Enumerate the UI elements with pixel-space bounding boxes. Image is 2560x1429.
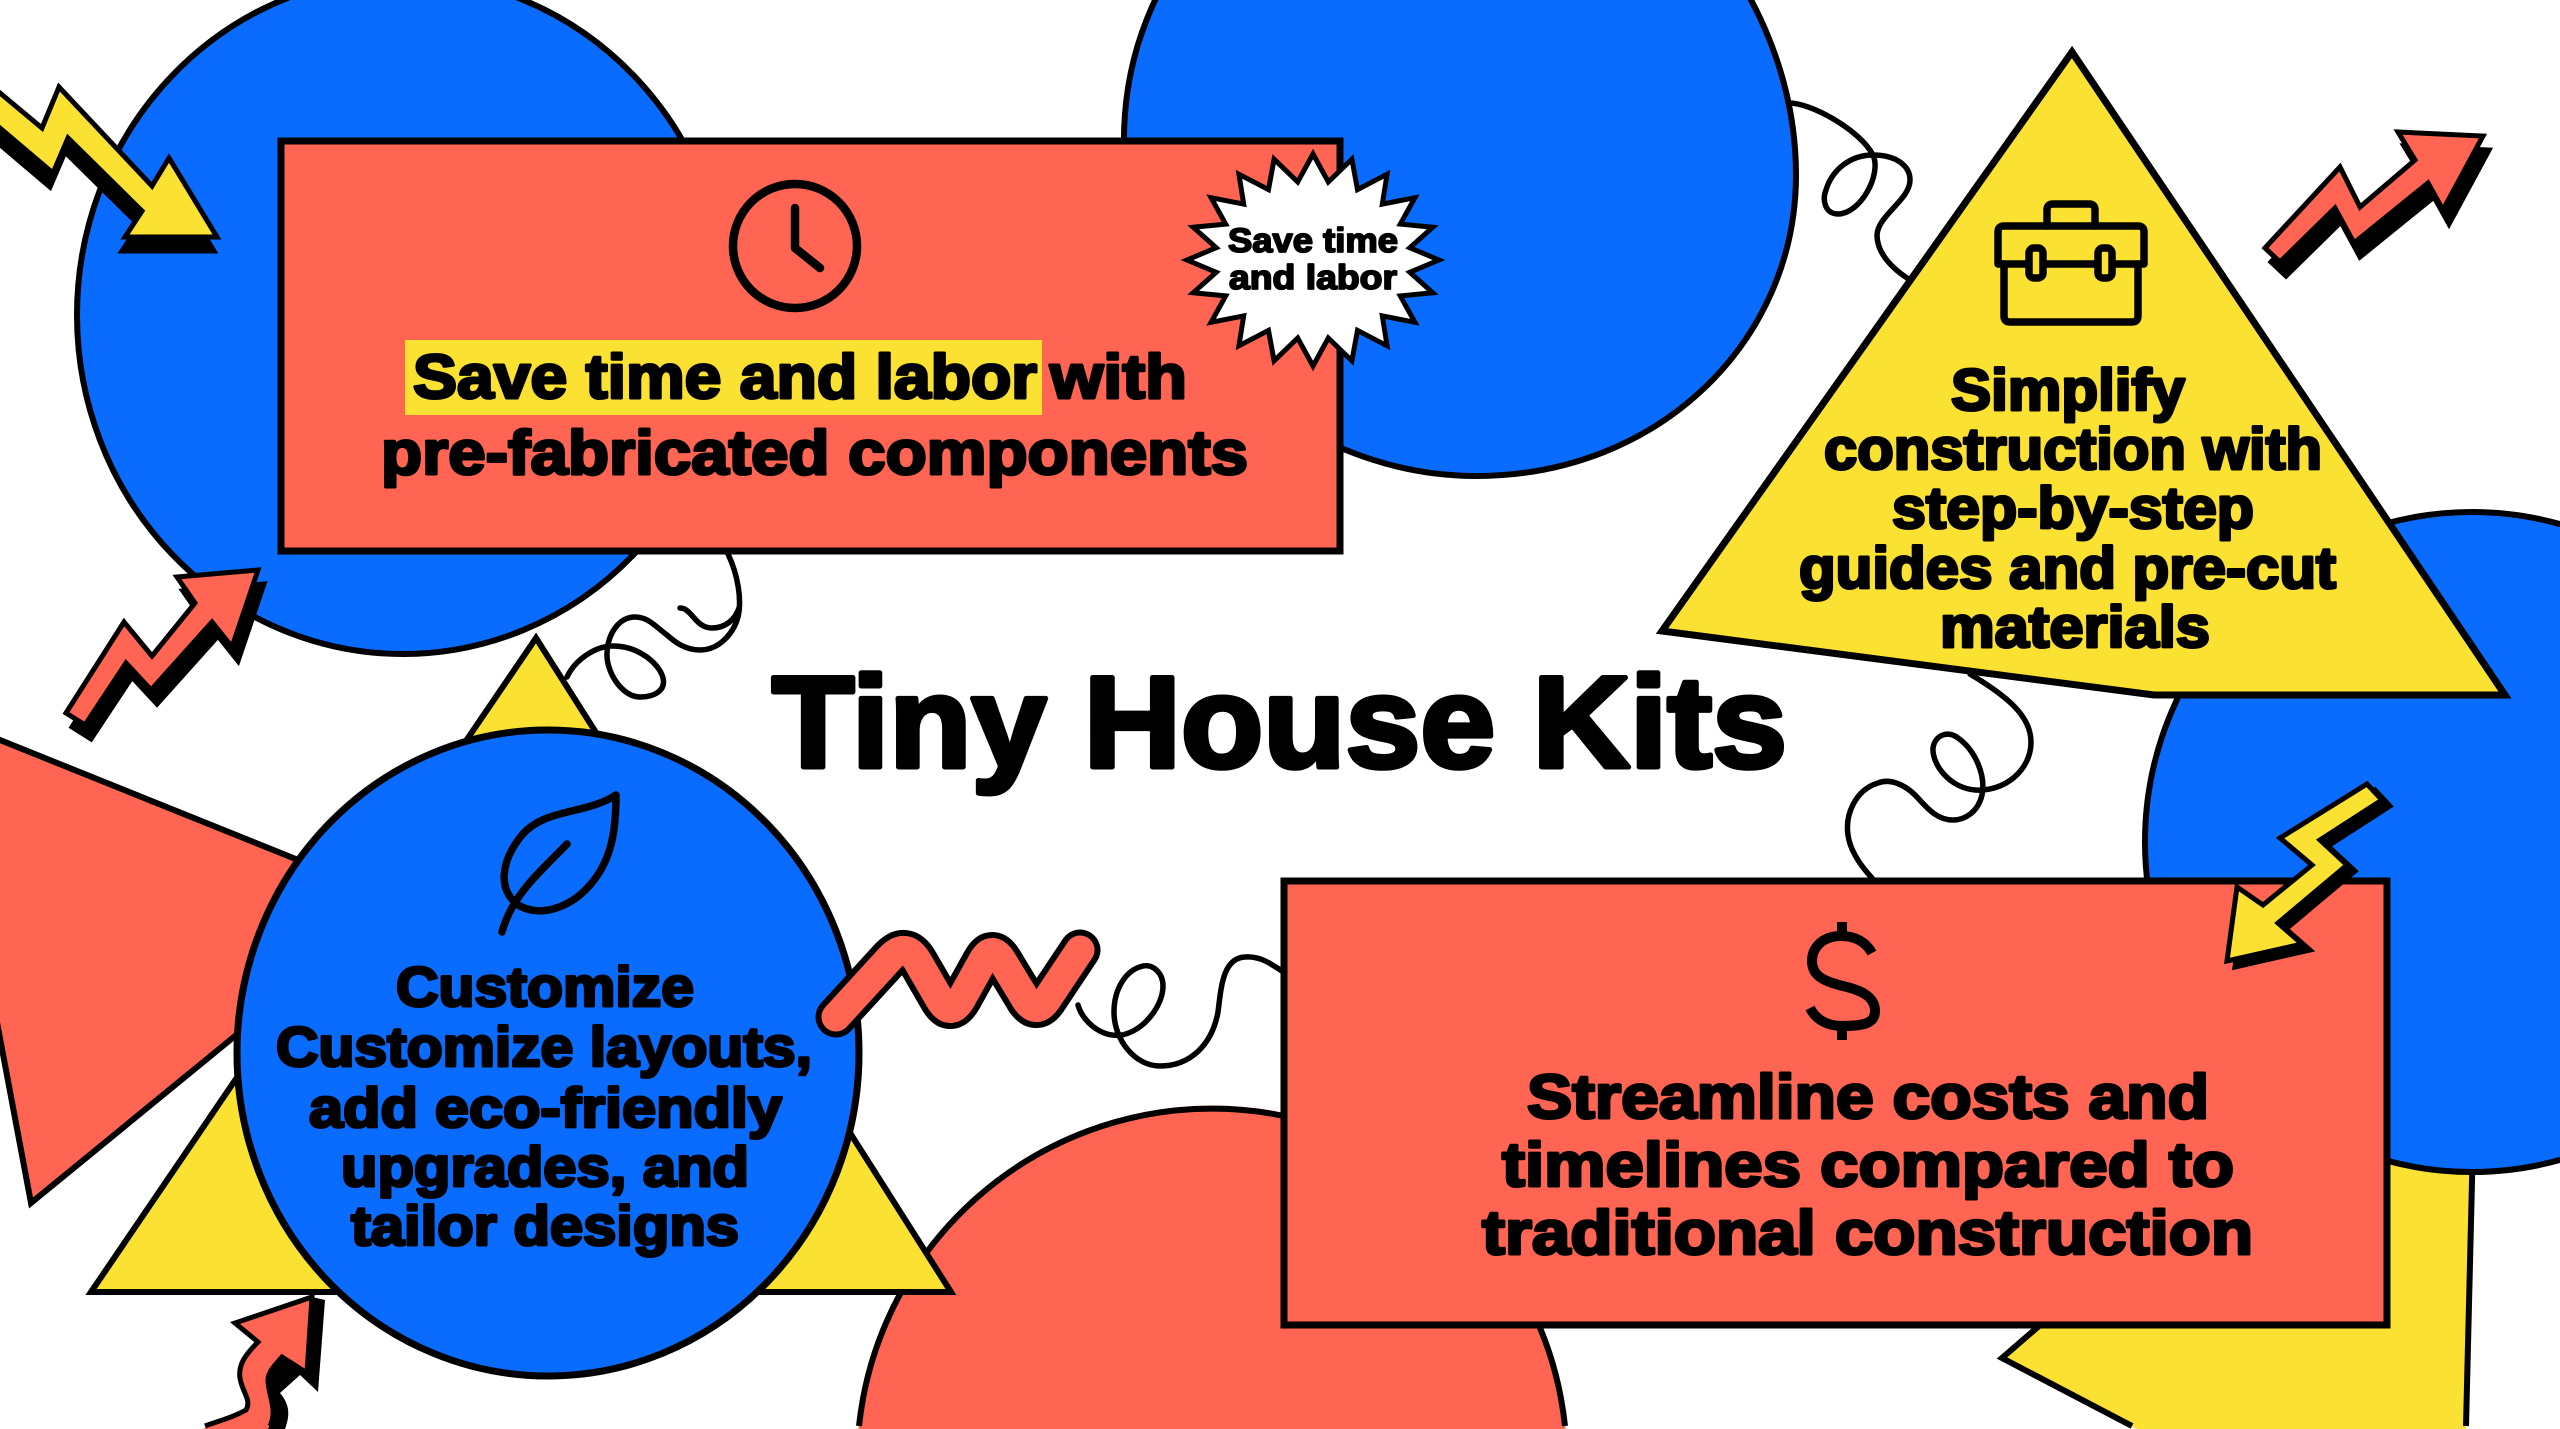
text: streamline: traditional construction [1482, 1199, 2253, 1268]
red triangle left [0, 736, 400, 1203]
text: streamline: timelines compared to [1502, 1131, 2234, 1200]
text: simplify: materials [1940, 595, 2210, 660]
panel: streamline rectangle [1284, 881, 2387, 1325]
blue circle top left [77, 0, 729, 654]
squiggle connector top left [567, 554, 740, 697]
callout: starburst badge: Save time [1228, 222, 1398, 260]
arrow: red bolt left [66, 570, 264, 739]
arrow: red bolt top right [2265, 132, 2489, 276]
text: simplify [1799, 358, 2336, 660]
arrow: yellow bolt top left [0, 87, 217, 251]
text: customize: Customize [396, 955, 694, 1018]
red circle bottom [858, 1105, 1566, 1429]
text: simplify: step-by-step [1892, 476, 2254, 541]
text: customize: upgrades, and [341, 1135, 749, 1198]
arrow: red bolt bottom left [203, 1297, 325, 1429]
text: save time: with [1049, 343, 1187, 412]
blue circle right [2145, 512, 2560, 1172]
icon: dollar sign [1810, 922, 1875, 1040]
text: simplify: construction with [1824, 417, 2322, 482]
panel: customize circle [237, 730, 859, 1376]
blue circle top centre [1124, 0, 1796, 476]
yellow shape bottom right [2002, 1100, 2474, 1429]
highlight behind text [405, 340, 1042, 415]
panel: save time rectangle [281, 141, 1340, 551]
squiggle connector right [1847, 674, 2031, 878]
text: streamline: Streamline costs and [1527, 1063, 2209, 1132]
icon: clock [733, 184, 857, 308]
icon: leaf [502, 795, 616, 932]
callout: starburst badge: and labor [1229, 259, 1397, 297]
text: save time: Save time and labor [413, 343, 1037, 412]
text: simplify: guides and pre-cut [1799, 536, 2336, 601]
zigzag connector [836, 950, 1080, 1017]
text: customize: tailor designs [351, 1194, 739, 1257]
squiggle connector bottom [1078, 957, 1282, 1066]
callout: starburst badge [1187, 154, 1439, 366]
arrow: yellow bolt lower right [2227, 784, 2390, 967]
text: save time [381, 343, 1248, 488]
text: streamline [1482, 1063, 2253, 1268]
yellow triangle left [91, 638, 951, 1292]
panel: simplify triangle [1662, 52, 2505, 695]
text: customize: add eco-friendly [309, 1076, 782, 1139]
squiggle connector top right [1788, 103, 1910, 278]
icon: toolbox [1998, 204, 2144, 322]
text: simplify: Simplify [1951, 358, 2185, 423]
text: save time: pre-fabricated components [381, 419, 1248, 488]
text: customize [276, 955, 812, 1257]
text: customize: Customize layouts, [276, 1015, 812, 1078]
title: Tiny House Kits [772, 649, 1787, 795]
